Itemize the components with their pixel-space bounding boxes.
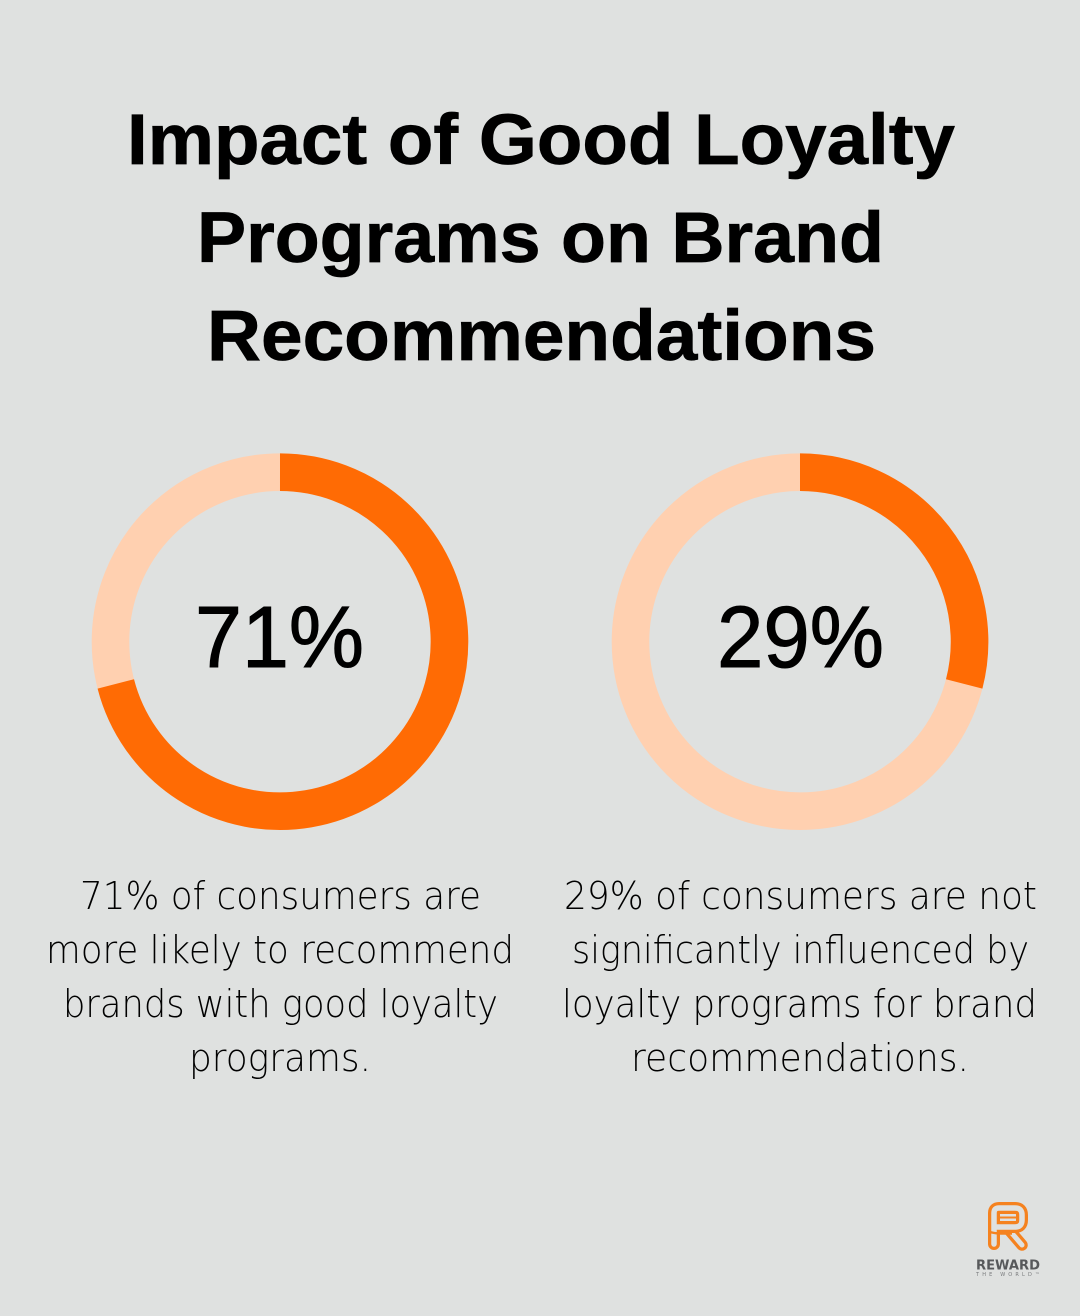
- description: 71%: brands with good loyalty: [63, 982, 498, 1027]
- description: 29%: recommendations.: [631, 1036, 969, 1081]
- title: Impact of Good Loyalty: [127, 101, 956, 180]
- panel: 29% statistic: [562, 472, 1037, 1081]
- description: 71%: [46, 874, 514, 1081]
- description: 71%: programs.: [189, 1036, 371, 1081]
- logo wordmark: REWARD: [976, 1258, 1040, 1274]
- description: 29%: significantly influenced by: [572, 928, 1029, 973]
- value: 71%: 71%: [195, 589, 364, 686]
- value: 29%: 29%: [717, 589, 884, 686]
- panel: 71% statistic: [46, 472, 514, 1081]
- icon: orange R mark: [988, 1208, 1022, 1245]
- description: 29%: loyalty programs for brand: [562, 982, 1037, 1027]
- description: 29%: [562, 874, 1037, 1081]
- description: 71%: more likely to recommend: [46, 928, 514, 973]
- donut chart: 29%: [630, 472, 970, 811]
- title: [127, 101, 956, 376]
- logo tagline: THE WORLD™: [975, 1272, 1040, 1278]
- title: Programs on Brand: [197, 199, 884, 278]
- description: 29%: 29% of consumers are not: [564, 874, 1037, 919]
- donut chart: 71%: [110, 472, 450, 811]
- title: Recommendations: [207, 297, 876, 376]
- description: 71%: 71% of consumers are: [80, 874, 481, 919]
- logo: Reward the World: [975, 1208, 1040, 1278]
